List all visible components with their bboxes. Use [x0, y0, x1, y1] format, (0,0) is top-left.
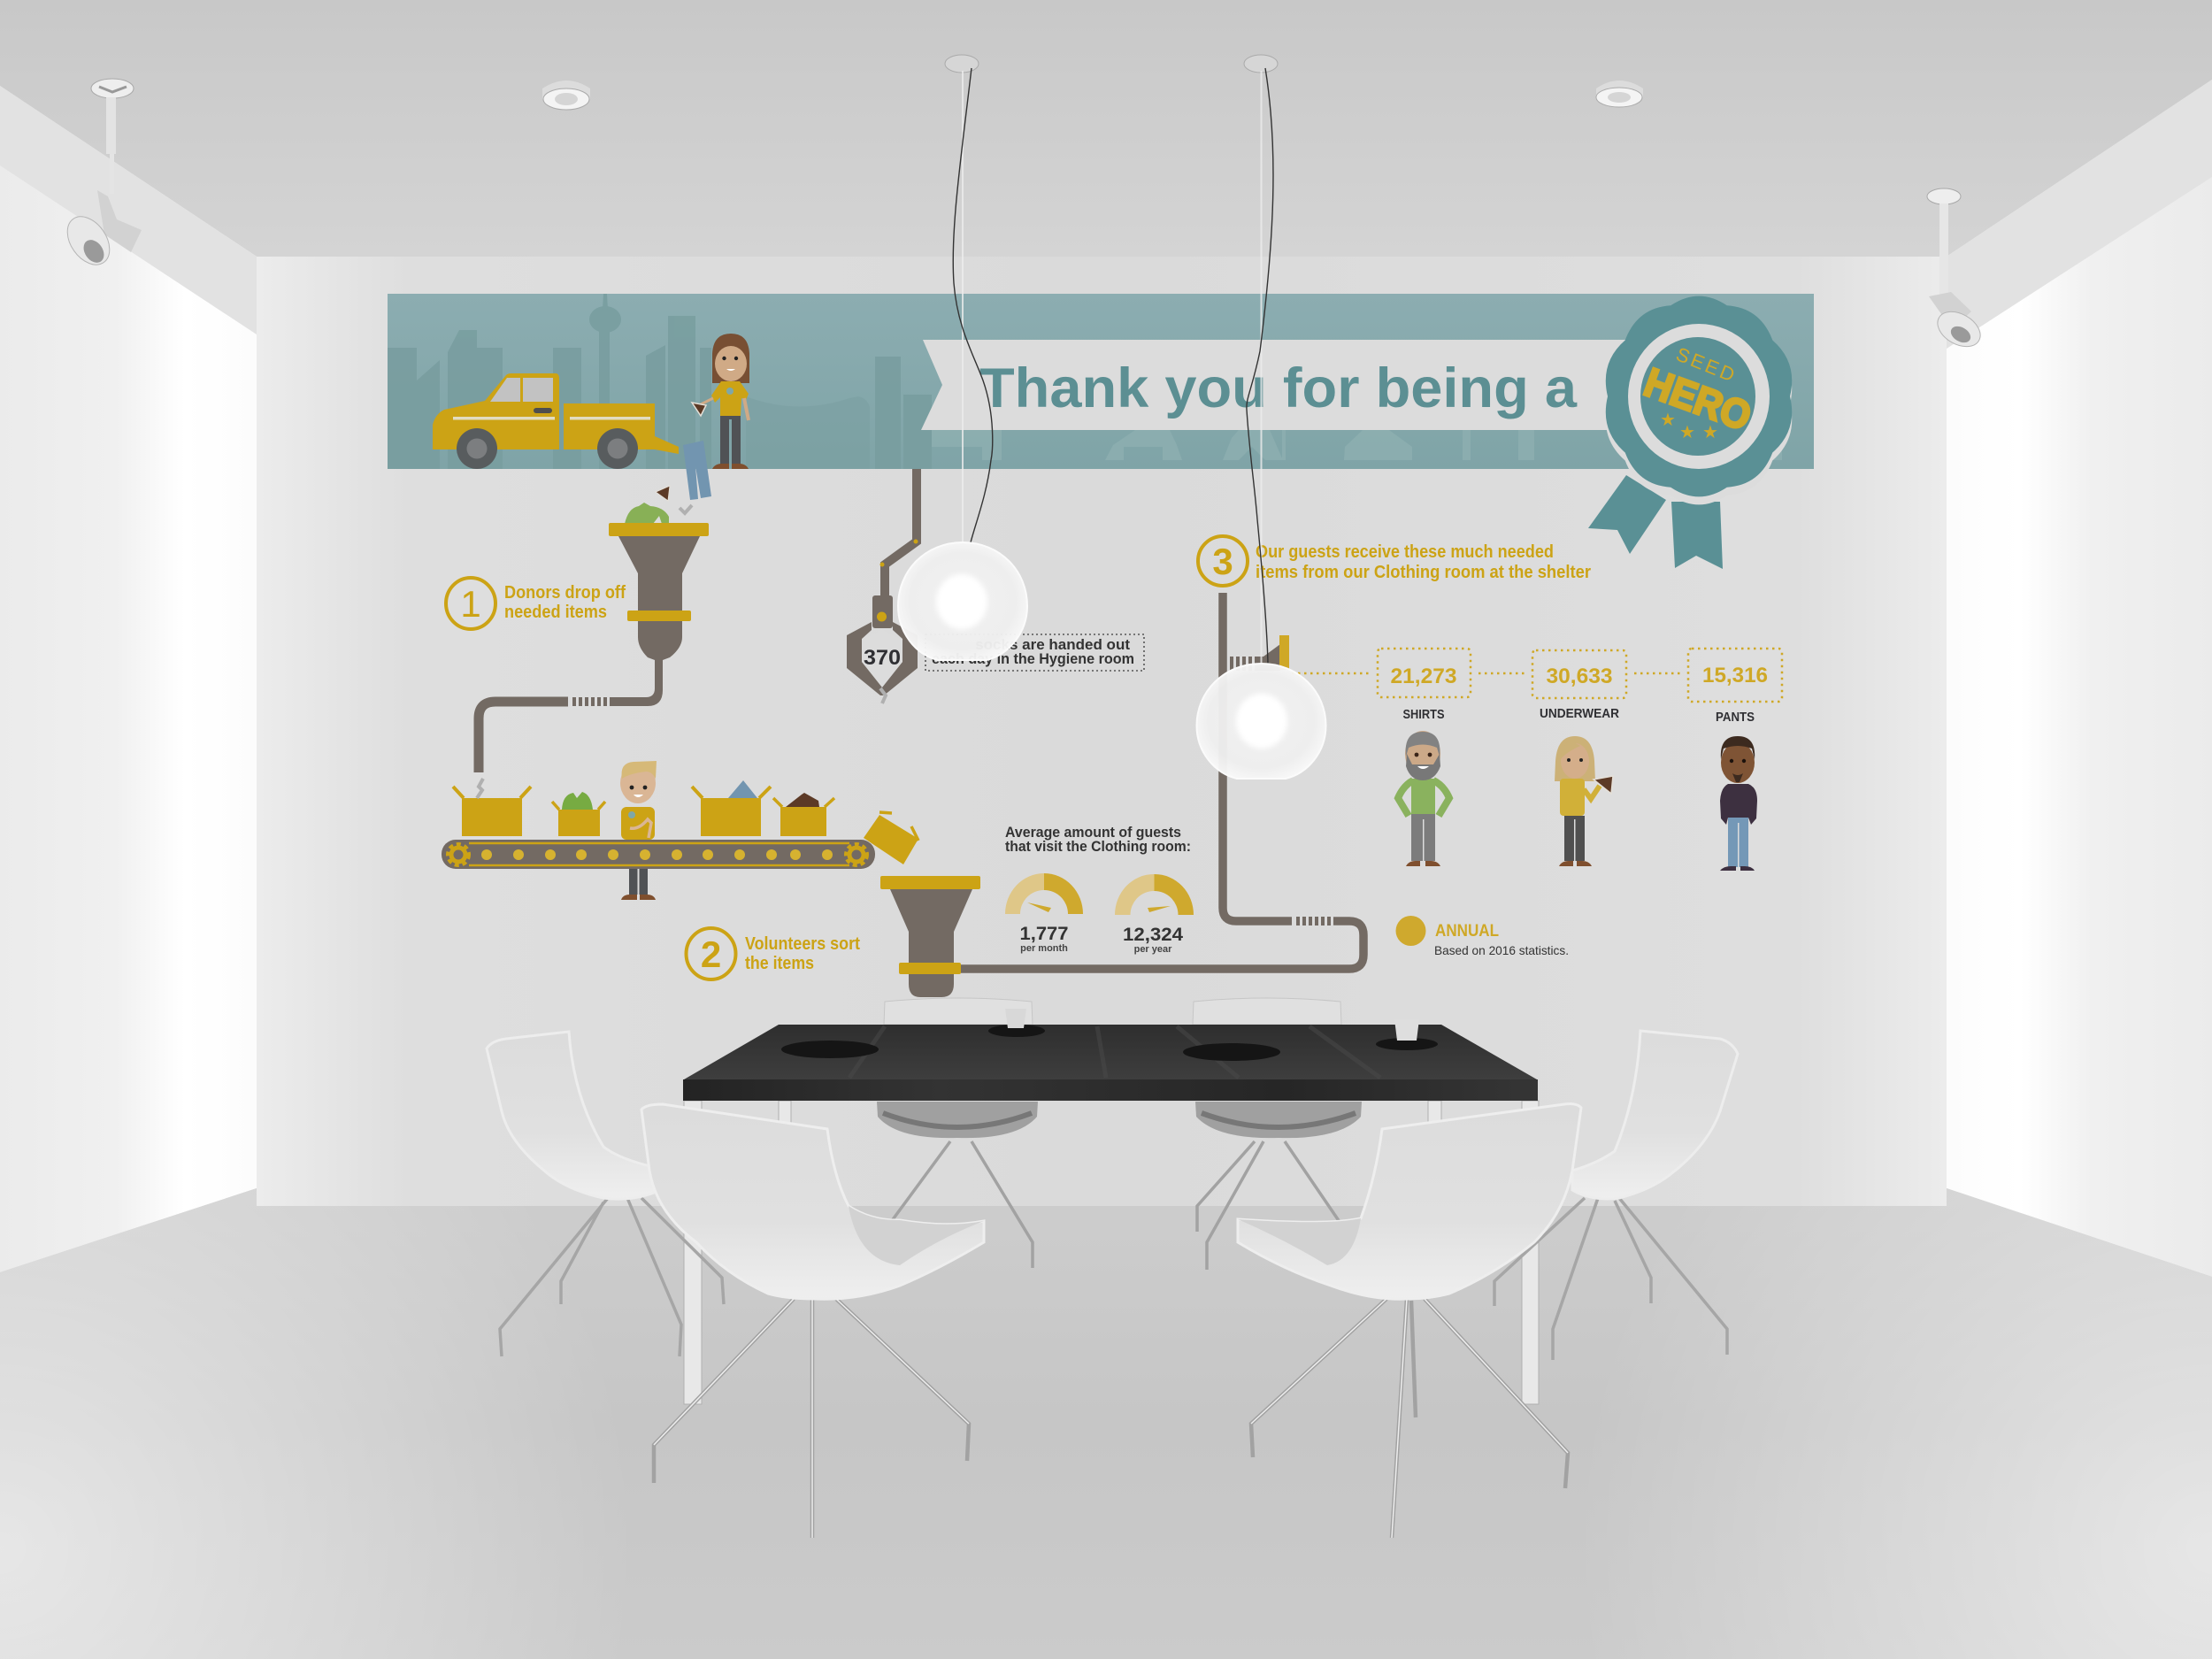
foreground chair left: [641, 1104, 984, 1538]
legend: annual: [1396, 916, 1569, 957]
ribbon tails: [1588, 475, 1666, 554]
gauge: per year: 12,324: [1123, 925, 1183, 945]
claw holding 370: [847, 469, 918, 703]
award seal: ★: [1702, 423, 1718, 442]
gauge: per year: per year: [1134, 944, 1172, 955]
back chair right: [1193, 998, 1362, 1270]
box A: [453, 779, 531, 836]
back chairs: [877, 998, 1362, 1270]
top nozzle: [1230, 635, 1289, 671]
gears: [448, 844, 867, 865]
box B with green shirt: [552, 792, 605, 836]
stat: shirts: 21,273: [1391, 664, 1456, 688]
step 2 callout: the items: [745, 954, 814, 973]
place settings: [781, 1009, 1438, 1061]
icon: right track spotlight: [1927, 188, 1986, 354]
side chair left: [487, 1032, 724, 1356]
gauge: per month: per month: [1020, 943, 1068, 954]
person: bearded man in green sweater: [1398, 731, 1449, 866]
person: man in dark sweater and jeans: [1720, 736, 1757, 871]
skyline buildings: [388, 294, 932, 469]
step 2 callout: [687, 928, 860, 979]
award seal: [1588, 296, 1792, 569]
title: Thank you for being a: [979, 357, 1578, 419]
claw holding 370: 370: [864, 646, 901, 670]
panel: banner with skyline: [388, 294, 1814, 469]
icon: pickup truck: [433, 373, 679, 469]
step 2 callout: Volunteers sort: [745, 934, 860, 954]
stat: underwear: 30,633: [1547, 664, 1612, 688]
hygiene text box: each day in the Hygiene room: [932, 650, 1134, 667]
step 3 callout: items from our Clothing room at the shelter: [1256, 563, 1591, 582]
funnel 1 with pipe to conveyor: [479, 523, 709, 772]
gauge: per month: 1,777: [1019, 924, 1069, 944]
volunteer legs: [621, 869, 656, 900]
box D with underwear: [773, 793, 834, 836]
step 1 callout: 1: [460, 583, 481, 625]
step 2 callout: 2: [701, 933, 721, 975]
step 3 callout: [1198, 536, 1591, 586]
pendant lamp 2: [1196, 55, 1325, 779]
ceiling: [0, 0, 2212, 257]
icon: right ceiling downlight: [1596, 81, 1643, 107]
side chair right: [1494, 1031, 1738, 1360]
stat: underwear: UNDERWEAR: [1540, 706, 1619, 721]
icon: falling jeans: [683, 441, 711, 500]
back chair left: [877, 998, 1038, 1268]
hygiene text box: [926, 634, 1144, 671]
pendant lamp 1: [898, 55, 1027, 660]
foreground chair right: [1238, 1104, 1581, 1538]
stat: underwear: [1532, 650, 1626, 721]
award seal: ★: [1679, 423, 1695, 442]
back wall: [257, 257, 1947, 1206]
icon: green sweater on funnel: [625, 503, 669, 524]
tipping box: [864, 812, 918, 864]
award seal: SEED: [1673, 342, 1740, 388]
step 1 callout: Donors drop off: [504, 583, 626, 603]
pale houses on lower band: [932, 430, 1782, 460]
hygiene text box: socks are handed out: [975, 636, 1130, 653]
icon: falling underwear: [656, 486, 670, 501]
stat: pants: [1688, 649, 1782, 725]
belt: [442, 840, 875, 869]
stats row: [1292, 649, 1782, 725]
stat: pants: 15,316: [1702, 664, 1768, 687]
conveyor belt with boxes: [442, 761, 918, 900]
icon: left ceiling downlight: [542, 81, 590, 110]
icon: woman donor: [692, 334, 749, 469]
gauge: per year: [1115, 874, 1194, 955]
dotted connectors: [1292, 672, 1680, 674]
left wall: [0, 86, 257, 1272]
icon: falling grey item: [680, 505, 692, 513]
step 1 callout: needed items: [504, 603, 607, 622]
box C with jeans: [692, 780, 771, 836]
table legs: [684, 1101, 1539, 1404]
stat: shirts: SHIRTS: [1403, 707, 1444, 722]
legend: annual: ANNUAL: [1435, 922, 1499, 941]
seal body: [1606, 304, 1792, 504]
award seal: HERO: [1639, 358, 1757, 440]
funnel 2 with pipe to step 3: [880, 593, 1363, 997]
legend: annual: Based on 2016 statistics.: [1434, 943, 1569, 957]
volunteer: [620, 761, 657, 840]
stat: shirts: [1378, 649, 1471, 722]
step 1 callout: [446, 578, 626, 629]
white ribbon: [921, 340, 1681, 430]
clothing room guests text: that visit the Clothing room:: [1005, 838, 1191, 855]
person: blonde woman with underwear: [1555, 736, 1613, 866]
dining table: [683, 1009, 1539, 1404]
right wall: [1947, 80, 2212, 1277]
step 3 callout: 3: [1212, 541, 1233, 582]
clothing room guests text: Average amount of guests: [1005, 824, 1181, 841]
floor: [0, 1188, 2212, 1659]
stat: pants: PANTS: [1716, 710, 1755, 725]
icon: left track spotlight: [58, 79, 142, 273]
gauge: per month: [1005, 873, 1083, 954]
step 3 callout: Our guests receive these much needed: [1256, 542, 1554, 562]
award seal: ★: [1660, 411, 1676, 430]
clothing room guests text: [1005, 824, 1191, 855]
